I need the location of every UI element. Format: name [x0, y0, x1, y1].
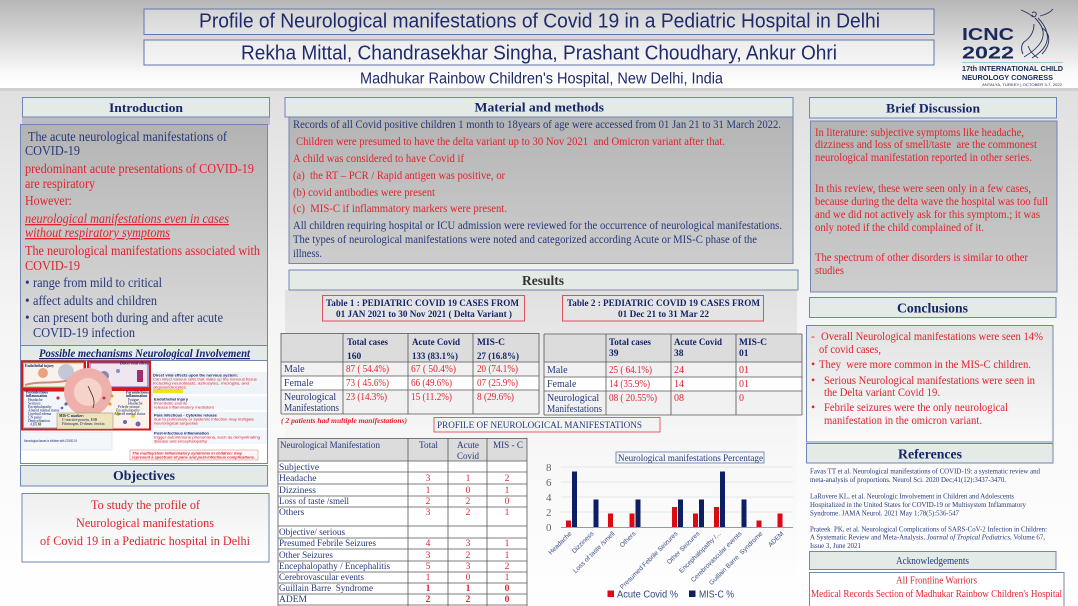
table 3: neurological manifestations: 2: [505, 474, 510, 484]
table 3: neurological manifestations: 2: [466, 551, 471, 561]
table 3: neurological manifestations: ADEM: [279, 595, 308, 605]
table 2: omicron variant cases: 01: [739, 349, 749, 359]
heading: material and methods: [285, 98, 793, 117]
logo: ICNC 2022: 2022: [962, 42, 1014, 62]
bar chart: neurological manifestations percentage: 4: [546, 492, 552, 504]
table 1: delta variant cases: [281, 333, 539, 414]
table 3: neurological manifestations: Headache: [279, 474, 316, 484]
text block: introduction body: affect adults and children: [33, 293, 157, 308]
heading: profile of neurological manifestations: PROFILE OF NEUROLOGICAL MANIFESTATIONS: [437, 420, 642, 430]
table 3: neurological manifestations: 3: [426, 474, 431, 484]
text block: discussion body: The spectrum of other disorders is similar to other: [815, 252, 1028, 264]
diagram: mechanisms of neurological involvement: Seizures: [28, 402, 41, 406]
table 1: delta variant cases: Female: [284, 378, 314, 389]
logo: ICNC 2022: ANTALYA, TURKEY | OCTOBER 3-7, 2022: [982, 83, 1062, 87]
text block: discussion body: studies: [815, 265, 844, 277]
text block: references list: Prateek PK, et al. Neurological Complications of SARS-CoV-2 Infection in Children:: [810, 524, 1047, 534]
authors: Rekha Mittal, Chandrasekhar Singha, Prashant Choudhary, Ankur Ohri: [241, 42, 837, 64]
heading: introduction: Introduction: [109, 100, 184, 115]
diagram: mechanisms of neurological involvement: Encephalopathy: [116, 408, 140, 412]
table 1: delta variant cases: 8 (29.6%): [477, 392, 514, 403]
diagram: mechanisms of neurological involvement: C-reactive protein, ESR: [62, 418, 98, 423]
heading: profile of neurological manifestations: [434, 418, 660, 432]
table 2: omicron variant cases: Male: [547, 365, 568, 376]
panel: material and methods: [285, 98, 793, 264]
table 3: neurological manifestations: [278, 438, 527, 606]
text block: conclusions body: [806, 326, 1053, 442]
bar chart: neurological manifestations percentage: Encephalopathy /...: [678, 530, 723, 575]
text block: conclusions body: -: [811, 329, 815, 343]
diagram: mechanisms of neurological involvement: inflammation: [26, 394, 47, 398]
table 3: neurological manifestations: Others: [279, 508, 305, 518]
table 2: omicron variant cases: Neurological: [547, 393, 599, 404]
text block: references list: LaRovere KL, et al. Neurologic Involvement in Children and Adolescents: [810, 492, 1014, 500]
table 3: neurological manifestations: Cerebrovascular events: [279, 573, 364, 583]
title: Profile of Neurological manifestations of Covid 19 in a Pediatric Hospital in Delhi: [199, 10, 880, 32]
text block: discussion body: [810, 121, 1057, 292]
table 3: neurological manifestations: 0: [466, 486, 471, 496]
panel: possible mechanisms: [20, 346, 268, 464]
chart legend: [608, 588, 734, 600]
bar chart: neurological manifestations percentage: 6: [546, 477, 552, 489]
table 1: delta variant cases: 20 (74.1%): [477, 364, 518, 375]
text block: conclusions body: the Delta variant Covid 19.: [824, 385, 940, 399]
table 3: neurological manifestations: 2: [466, 595, 471, 605]
logo: ICNC 2022: 17th INTERNATIONAL CHILD: [962, 66, 1063, 73]
diagram: mechanisms of neurological involvement: MIS-C marker:: [59, 414, 84, 418]
text block: acknowledgements: All Frontline Warriors: [896, 576, 977, 586]
text block: conclusions body: Overall Neurological manifestations were seen 14%: [821, 329, 1043, 343]
table 3: neurological manifestations: 1: [466, 584, 471, 594]
table 2: omicron variant cases: 01: [739, 379, 749, 390]
text block: conclusions body: Serious Neurological manifestations were seen in: [824, 373, 1035, 387]
text block: objectives: [22, 494, 269, 562]
diagram: mechanisms of neurological involvement: inflammation: [126, 394, 147, 398]
text block: conclusions body: •: [811, 357, 815, 371]
text block: conclusions body: •: [811, 400, 815, 414]
table 3: neurological manifestations: Objective/ serious: [279, 528, 345, 538]
bar chart: neurological manifestations percentage: ADEM: [767, 530, 785, 549]
diagram: mechanisms of neurological involvement: [20, 360, 268, 464]
text block: conclusions body: •: [811, 373, 815, 387]
heading: objectives: Objectives: [113, 468, 175, 483]
table 3: neurological manifestations: Encephalopathy / Encephalitis: [279, 562, 390, 572]
text block: introduction body: •: [25, 310, 30, 325]
chart title: Neurological manifestations Percentage: [618, 453, 763, 464]
table 1 caption: [322, 296, 524, 321]
table 1 caption: Table 1 : PEDIATRIC COVID 19 CASES FROM: [326, 298, 520, 308]
diagram: mechanisms of neurological involvement: Postinfectious: [26, 390, 48, 394]
text block: discussion body: and we did not actively ask for this symptom.; it was: [815, 209, 1040, 221]
text block: references list: [810, 466, 1047, 550]
table 2: omicron variant cases: 25 ( 64.1%): [609, 365, 652, 376]
table 3: neurological manifestations: 1: [505, 486, 510, 496]
table 2: omicron variant cases: 01: [739, 365, 749, 376]
heading: results: [289, 270, 798, 290]
text block: methods body: illness.: [293, 248, 322, 260]
diagram: mechanisms of neurological involvement: Altered mental status: [28, 408, 60, 412]
diagram: mechanisms of neurological involvement: Endothelial injury: [154, 398, 189, 402]
text block: acknowledgements: [810, 572, 1064, 606]
table 3: neurological manifestations: 0: [466, 573, 471, 583]
table 3: neurological manifestations: 2: [466, 497, 471, 507]
panel: objectives: [20, 466, 269, 562]
text block: methods body: A child was considered to have Covid if: [293, 153, 464, 165]
diagram: mechanisms of neurological involvement: Headache: [128, 402, 143, 406]
bar chart: neurological manifestations percentage: Cerebrovascular events: [690, 530, 744, 584]
logo: ICNC 2022: NEUROLOGY CONGRESS: [962, 75, 1053, 82]
diagram: mechanisms of neurological involvement: Demyelination: [28, 419, 50, 423]
diagram: mechanisms of neurological involvement: neurological sequelae: [154, 422, 198, 426]
bar chart: neurological manifestations percentage: 0: [546, 522, 552, 534]
table 1: delta variant cases: 66 (49.6%): [411, 378, 452, 389]
diagram: mechanisms of neurological involvement: Endothelial injury: [25, 364, 54, 368]
diagram: mechanisms of neurological involvement: Headache: [28, 398, 43, 402]
table 1: delta variant cases: 27 (16.8%): [477, 351, 519, 362]
table 3: neurological manifestations: Dizziness: [279, 486, 316, 496]
text block: introduction body: are respiratory: [25, 176, 95, 191]
diagram: mechanisms of neurological involvement: trigger autoimmune phenomena, such as demyelinating: [154, 436, 260, 440]
table 1: delta variant cases: Acute Covid: [412, 338, 461, 348]
text block: objectives: To study the profile of: [91, 497, 201, 512]
table 3: neurological manifestations: Subjective: [279, 463, 319, 473]
table 1: delta variant cases: Male: [284, 364, 305, 375]
diagram: mechanisms of neurological involvement: Neurological issues in children with COVID-19: [24, 439, 77, 443]
text block: introduction body: without respiratory symptoms: [25, 225, 170, 240]
diagram: mechanisms of neurological involvement: CN palsy: [28, 416, 42, 420]
logo: ICNC 2022: ICNC: [962, 24, 1014, 44]
panel: results: [278, 98, 1064, 606]
text block: discussion body: In this review, these were seen only in a few cases,: [815, 183, 1031, 195]
text block: references list: Issue 3, June 2021: [810, 541, 861, 550]
text block: methods body: Records of all Covid positive children 1 month to 18years of age were accessed from 01 Jan 21 to 31 March 2022.: [293, 119, 781, 131]
authors: [144, 40, 934, 65]
table 1: delta variant cases: 133 (83.1%): [412, 351, 458, 362]
text block: introduction body: However:: [25, 193, 72, 208]
heading: brief discussion: Brief Discussion: [886, 100, 981, 116]
diagram: mechanisms of neurological involvement: Fibrinogen, D-dimer, ferritin: [62, 422, 105, 427]
table 2 caption: [562, 296, 764, 321]
diagram: mechanisms of neurological involvement: Direct viral effects: [120, 362, 150, 366]
bar chart: neurological manifestations percentage: 8: [546, 462, 552, 474]
table 3: neurological manifestations: 3: [466, 539, 471, 549]
text block: introduction body: can present both during and after acute: [33, 310, 223, 325]
diagram: mechanisms of neurological involvement: thrombotic events: [154, 402, 187, 406]
diagram: mechanisms of neurological involvement: disease and encephalopathy: [154, 440, 207, 444]
table 2: omicron variant cases: 39: [609, 349, 619, 359]
heading: objectives: [20, 466, 268, 486]
bar chart: neurological manifestations percentage: Other Seizures: [666, 530, 702, 566]
bar chart: neurological manifestations percentage: [546, 452, 793, 600]
panel: references: [806, 444, 1053, 550]
table 3: neurological manifestations: Neurological Manifestation: [280, 440, 380, 451]
table 2: omicron variant cases: 08 ( 20.55%): [609, 393, 657, 404]
text block: introduction body: neurological manifestations even in cases: [25, 211, 229, 226]
table 1: delta variant cases: 73 ( 45.6%): [346, 378, 389, 389]
bar chart: neurological manifestations percentage: Headache: [548, 530, 574, 556]
heading: references: References: [898, 446, 962, 462]
table 3: neurological manifestations: 3: [426, 508, 431, 518]
table 2: omicron variant cases: 08: [674, 393, 684, 404]
table 1: delta variant cases: 87 ( 54.4%): [346, 364, 389, 375]
text block: discussion body: In literature: subjective symptoms like headache,: [815, 127, 1024, 139]
text block: methods body: All children requiring hospital or ICU admission were reviewed for the occurrence of neurological manifestations.: [293, 220, 782, 232]
text block: methods body: (b) covid antibodies were present: [293, 187, 436, 199]
text block: introduction body: The acute neurological manifestations of: [28, 129, 228, 144]
text block: objectives: of Covid 19 in a Pediatric hospital in Delhi: [40, 533, 250, 548]
table 1: delta variant cases: Neurological: [284, 392, 336, 403]
heading: conclusions: Conclusions: [897, 300, 968, 316]
bar chart: neurological manifestations percentage: Dizziness: [571, 530, 596, 555]
text block: references list: Hospitalized in the United States for COVID-19 or Multisystem Inflammatory: [810, 500, 1026, 509]
table 3: neurological manifestations: 0: [505, 595, 510, 605]
diagram: mechanisms of neurological involvement: Can infect various cells that make up the nervous tissue: [153, 378, 257, 382]
text block: introduction body: The neurological manifestations associated with: [25, 243, 260, 258]
diagram: mechanisms of neurological involvement: release inflammatory mediators: [154, 406, 214, 410]
diagram: mechanisms of neurological involvement: Para infectious - Cytokine release: [154, 414, 217, 418]
table 3: neurological manifestations: Covid: [457, 452, 479, 462]
table 3: neurological manifestations: Other Seizures: [279, 551, 333, 561]
panel: acknowledgements: [810, 552, 1064, 606]
table 3: neurological manifestations: 1: [505, 551, 510, 561]
table 3: neurological manifestations: Guillain Barre Syndrome: [279, 584, 373, 594]
table 3: neurological manifestations: 2: [466, 508, 471, 518]
text block: introduction body: COVID-19 infection: [33, 325, 135, 340]
heading: brief discussion: [810, 98, 1056, 118]
table 2: omicron variant cases: 14: [674, 379, 684, 390]
table 3: neurological manifestations: 0: [505, 497, 510, 507]
text block: references list: Syndrome. JAMA Neurol. 2021 May 1;78(5):536-547: [810, 508, 959, 518]
text block: discussion body: neurological manifestation reported in other series.: [815, 152, 1032, 164]
heading: possible mechanisms: Possible mechanisms Neurological Involvement: [39, 346, 251, 360]
table 2: omicron variant cases: Total cases: [609, 338, 651, 348]
diagram: mechanisms of neurological involvement: Febrile seizure: [118, 405, 140, 409]
table 3: neurological manifestations: 4: [426, 539, 431, 549]
text block: introduction body: predominant acute presentations of COVID-19: [25, 161, 254, 176]
bar chart: neurological manifestations percentage: 2: [546, 507, 552, 519]
table 2 caption: 01 Dec 21 to 31 Mar 22: [618, 309, 710, 319]
table 2: omicron variant cases: 0: [739, 393, 744, 404]
diagram: mechanisms of neurological involvement: Cerebral edema: [28, 412, 52, 416]
text block: objectives: Neurological manifestations: [76, 515, 214, 530]
table 3: neurological manifestations: Presumed Febrile Seizures: [279, 539, 376, 549]
table 1: delta variant cases: 07 (25.9%): [477, 378, 518, 389]
table 3: neurological manifestations: 5: [426, 562, 431, 572]
table 3: neurological manifestations: 2: [505, 562, 510, 572]
table 1 footnote: ( 2 patients had multiple manifestations): [281, 416, 407, 425]
heading: material and methods: Material and methods: [474, 100, 604, 114]
text block: introduction body: •: [25, 275, 30, 290]
text block: methods body: The types of neurological manifestations were noted and categorized according Acute or MIS-C phase of the: [293, 234, 757, 246]
text block: conclusions body: Febrile seizures were the only neurological: [824, 400, 1009, 414]
text block: conclusions body: manifestation in the omicron variant.: [824, 413, 982, 427]
table 3: neurological manifestations: 1: [426, 584, 431, 594]
table 2: omicron variant cases: MIS-C: [739, 338, 767, 348]
table 2: omicron variant cases: Manifestations: [547, 404, 602, 415]
table 3: neurological manifestations: 1: [505, 573, 510, 583]
table 2: omicron variant cases: 14 (35.9%): [609, 379, 650, 390]
heading: references: [806, 444, 1053, 463]
bar chart: neurological manifestations percentage: Presumed Febrile Seizures: [619, 530, 680, 591]
table 3: neurological manifestations: 2: [426, 497, 431, 507]
table 1: delta variant cases: 23 (14.3%): [346, 392, 387, 403]
panel: conclusions: [806, 298, 1056, 442]
bar chart: neurological manifestations percentage: Guillain Barre Syndrome: [708, 530, 765, 587]
text block: conclusions body: of covid cases,: [819, 342, 881, 356]
table 2: omicron variant cases: 24: [674, 365, 684, 376]
table 3: neurological manifestations: 1: [426, 486, 431, 496]
table 2: omicron variant cases: 38: [674, 349, 684, 359]
diagram: mechanisms of neurological involvement: The multisystem inflammatory syndrome in children: may: [132, 452, 243, 456]
table 1 caption: 01 JAN 2021 to 30 Nov 2021 ( Delta Variant ): [336, 309, 512, 319]
text block: introduction body: COVID-19: [25, 258, 80, 273]
diagram: mechanisms of neurological involvement: Altered mental status: [114, 412, 146, 416]
bar chart: neurological manifestations percentage: Others: [619, 530, 638, 549]
text block: conclusions body: They were more common in the MIS-C children.: [819, 357, 1031, 371]
table 2: omicron variant cases: Female: [547, 379, 577, 390]
table 1: delta variant cases: 160: [347, 352, 362, 362]
table 2: omicron variant cases: Acute Covid: [674, 338, 723, 348]
panel: brief discussion: [810, 98, 1057, 292]
text block: references list: A Systematic Review and Meta-Analysis, Journal of Tropical Pediatrics, Volume 67,: [810, 532, 1045, 542]
text block: introduction body: •: [25, 293, 30, 308]
table 1: delta variant cases: MIS-C: [477, 338, 505, 348]
text block: methods body: Children were presumed to have the delta variant up to 30 Nov 2021 and Omicron variant after that.: [296, 136, 725, 148]
diagram: mechanisms of neurological involvement: Direct viral effects upon the nervous system:: [153, 374, 238, 378]
text block: discussion body: because during the delta wave the hospital was too full: [815, 196, 1048, 208]
table 3: neurological manifestations: 1: [505, 539, 510, 549]
table 2: omicron variant cases: [544, 334, 802, 415]
text block: introduction body: [20, 124, 268, 346]
diagram: mechanisms of neurological involvement: oligodendrocytes.: [153, 386, 187, 390]
heading: results: Results: [522, 273, 564, 288]
table 1: delta variant cases: 15 (11.2%): [411, 392, 452, 403]
table 3: neurological manifestations: 0: [505, 584, 510, 594]
diagram: mechanisms of neurological involvement: Parainfectious: [126, 390, 149, 394]
table 1: delta variant cases: Total cases: [347, 338, 388, 348]
heading: acknowledgements: Acknowledgements: [896, 556, 969, 567]
text block: methods body: [289, 117, 793, 264]
hospital affiliation: Madhukar Rainbow Children's Hospital, New Delhi, India: [360, 70, 723, 88]
text block: discussion body: only noted if the child complained of it.: [815, 222, 984, 234]
heading: introduction: [22, 98, 270, 117]
text block: references list: meta-analysis of proportions. Neurol Sci. 2020 Dec;41(12):3437-3470.: [810, 475, 1006, 484]
diagram: mechanisms of neurological involvement: Encephalopathy: [28, 405, 52, 409]
table 3: neurological manifestations: 1: [466, 474, 471, 484]
chart legend: MIS-C %: [699, 588, 734, 600]
diagram: mechanisms of neurological involvement: ADEM: [30, 422, 42, 426]
diagram: mechanisms of neurological involvement: including neuroblasts, astrocytes, microglia, and: [153, 382, 249, 386]
text block: methods body: (a) the RT – PCR / Rapid antigen was positive, or: [293, 170, 505, 182]
diagram: mechanisms of neurological involvement: Fatigue: [128, 398, 139, 402]
panel: introduction: [20, 98, 270, 346]
table 3: neurological manifestations: 1: [426, 573, 431, 583]
table 3: neurological manifestations: 1: [505, 508, 510, 518]
table 1: delta variant cases: 67 ( 50.4%): [411, 364, 456, 375]
text block: introduction body: range from mild to critical: [33, 275, 162, 290]
text block: discussion body: dizziness and loss of smell/taste are the commonest: [815, 139, 1038, 151]
table 2 caption: Table 2 : PEDIATRIC COVID 19 CASES FROM: [567, 298, 761, 308]
text block: introduction body: COVID-19: [25, 143, 80, 158]
table 3: neurological manifestations: 2: [426, 595, 431, 605]
diagram: mechanisms of neurological involvement: represent a spectrum of para- and post-infectious complications.: [132, 456, 255, 460]
table 3: neurological manifestations: Total: [419, 441, 438, 451]
table 3: neurological manifestations: Loss of taste /smell: [279, 496, 349, 507]
heading: conclusions: [810, 298, 1056, 318]
diagram: mechanisms of neurological involvement: due to pulmonary or systemic infection may instigate: [154, 418, 254, 422]
table 3: neurological manifestations: MIS - C: [493, 441, 523, 451]
chart legend: Acute Covid %: [617, 588, 678, 600]
table 3: neurological manifestations: 3: [466, 562, 471, 572]
text block: methods body: (c) MIS-C if inflammatory markers were present.: [293, 203, 507, 215]
diagram: mechanisms of neurological involvement: Post-infectious inflammation: [154, 432, 210, 436]
bar chart: neurological manifestations percentage: Loss of taste /smell: [572, 530, 617, 575]
table 3: neurological manifestations: 3: [426, 551, 431, 561]
text block: references list: Favas TT et al. Neurological manifestations of COVID-19: a systematic review and: [810, 466, 1040, 476]
logo: ICNC 2022: [962, 9, 1063, 87]
table 1: delta variant cases: Manifestations: [284, 403, 339, 414]
heading: acknowledgements: [810, 552, 1056, 570]
table 3: neurological manifestations: Acute: [457, 441, 479, 451]
